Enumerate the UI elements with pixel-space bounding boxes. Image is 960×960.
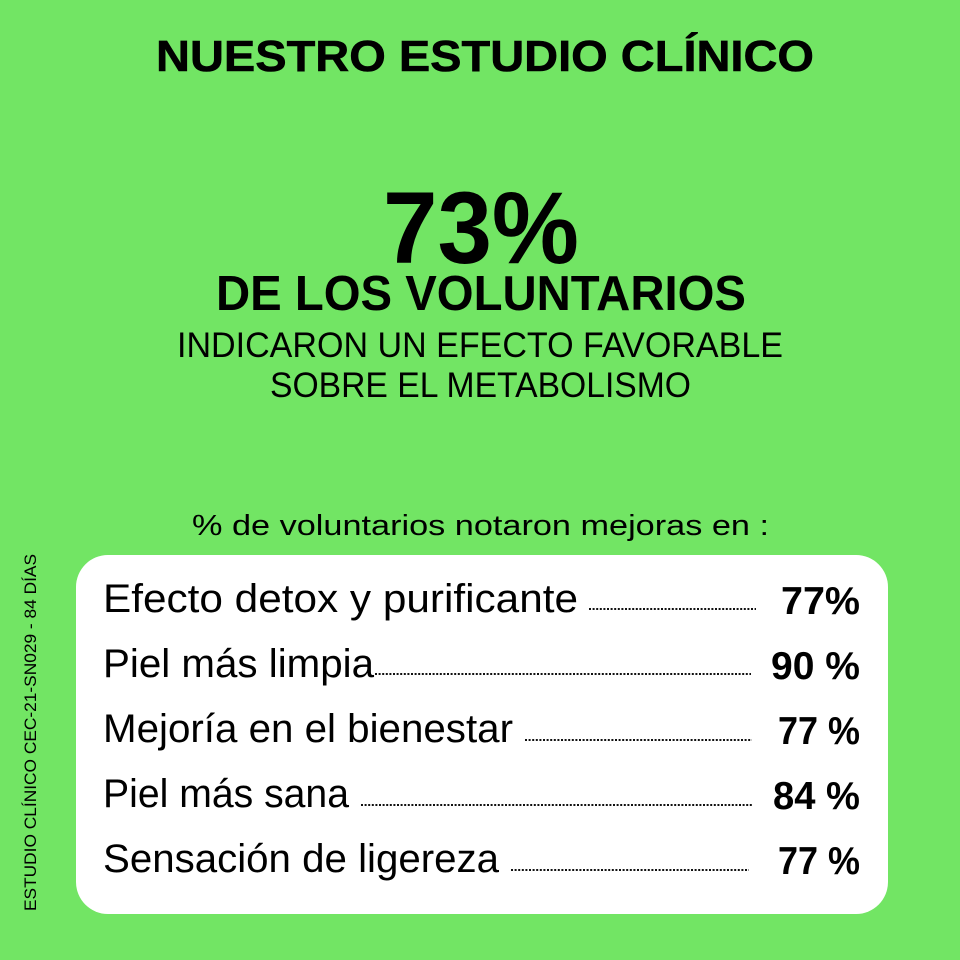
row: sensación de ligereza: 77 % — [778, 840, 860, 883]
row: mejoría en el bienestar — [103, 707, 860, 753]
row: efecto detox — [103, 577, 860, 623]
panel: results card — [76, 555, 888, 914]
side note: study reference: ESTUDIO CLÍNICO CEC-21-SN029 - 84 DÍAS — [21, 554, 40, 911]
list intro: % de voluntarios notaron mejoras en : — [192, 510, 769, 542]
row: piel más limpia — [103, 642, 860, 688]
row: mejoría en el bienestar: Mejoría en el bienestar — [103, 707, 513, 751]
description text: SOBRE EL METABOLISMO — [270, 366, 691, 405]
row: sensación de ligereza — [103, 837, 860, 883]
headline number: 73% — [383, 171, 579, 285]
description text — [177, 326, 783, 405]
row: mejoría en el bienestar: 77 % — [778, 710, 860, 753]
row: sensación de ligereza: Sensación de ligereza — [103, 837, 500, 881]
row: piel más sana: Piel más sana — [103, 772, 350, 816]
row: piel más limpia: 90 % — [771, 645, 860, 688]
row: efecto detox: Efecto detox y purificante — [103, 577, 578, 621]
description text: INDICARON UN EFECTO FAVORABLE — [177, 326, 783, 365]
row: piel más sana: 84 % — [773, 775, 860, 818]
title: NUESTRO ESTUDIO CLÍNICO — [156, 31, 814, 81]
row: piel más sana — [103, 772, 860, 818]
headline subject: DE LOS VOLUNTARIOS — [216, 267, 746, 321]
row: efecto detox: 77% — [781, 580, 860, 623]
row: piel más limpia: Piel más limpia — [103, 642, 375, 686]
